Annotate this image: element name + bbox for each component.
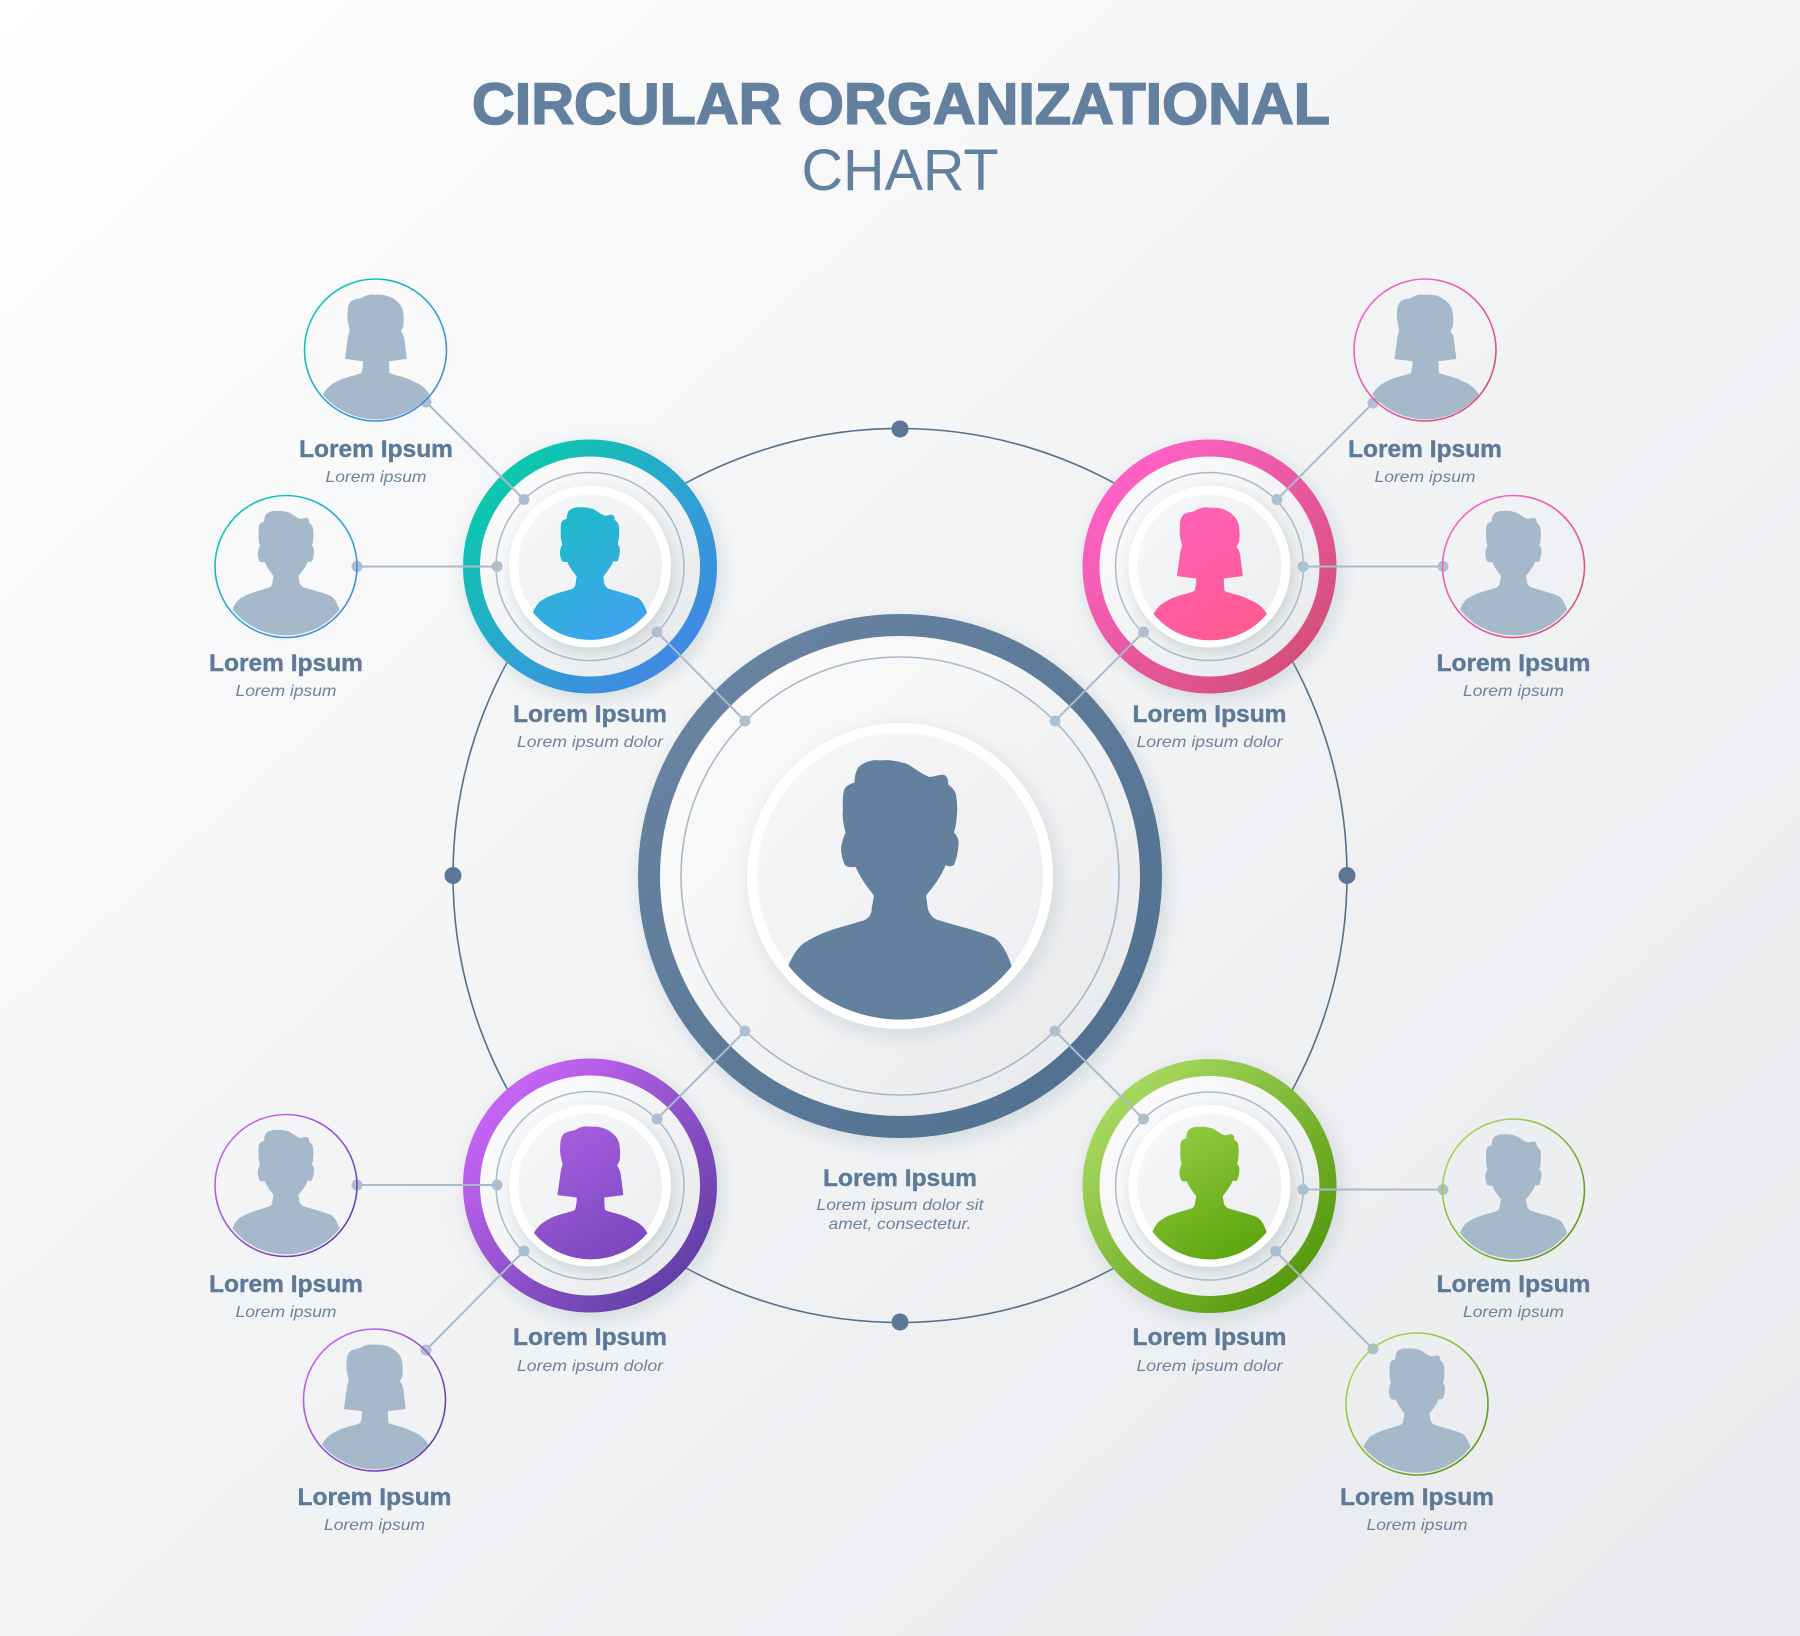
member: top-left inner <box>209 496 363 700</box>
central label: Lorem Ipsum <box>823 1165 977 1192</box>
ring <box>472 448 708 685</box>
panel: central leader <box>649 625 1151 1127</box>
outer orbit with dots <box>444 420 1356 1330</box>
title <box>472 72 1330 203</box>
panel: top-left manager <box>472 448 708 751</box>
member: bottom-right inner <box>1436 1119 1590 1321</box>
thin orbit <box>1116 1092 1304 1280</box>
member: top-left outer: Lorem Ipsum <box>299 436 453 463</box>
title: CHART <box>802 138 998 203</box>
member: bottom-right outer <box>1340 1333 1494 1534</box>
avatar <box>1153 507 1267 640</box>
label <box>513 1324 667 1375</box>
member: top-left outer <box>299 279 453 486</box>
panel: top-right manager <box>1091 448 1328 751</box>
member: top-left outer: Lorem ipsum <box>326 469 426 486</box>
member: bottom-right inner: Lorem Ipsum <box>1436 1271 1590 1298</box>
central avatar silhouette <box>788 760 1012 1020</box>
label <box>1132 701 1286 751</box>
central label: Lorem ipsum dolor sit <box>816 1197 984 1214</box>
member: bottom-left inner: Lorem Ipsum <box>209 1271 363 1298</box>
member: top-right outer <box>1348 279 1502 486</box>
label: Lorem ipsum dolor <box>517 734 664 751</box>
member: bottom-right outer: Lorem ipsum <box>1366 1517 1468 1534</box>
label: Lorem ipsum dolor <box>1136 734 1283 751</box>
avatar <box>534 1126 648 1259</box>
avatar frame <box>1133 1110 1286 1262</box>
inner orbit <box>681 657 1119 1095</box>
member: top-left inner: Lorem Ipsum <box>209 650 363 677</box>
ring <box>472 1067 708 1304</box>
member: bottom-left outer <box>298 1329 452 1534</box>
member: top-right inner: Lorem ipsum <box>1463 683 1564 700</box>
title: CIRCULAR ORGANIZATIONAL <box>472 72 1330 137</box>
member: bottom-left outer: Lorem Ipsum <box>298 1484 452 1511</box>
label: Lorem Ipsum <box>513 701 667 728</box>
label: Lorem Ipsum <box>513 1324 667 1351</box>
member: bottom-right inner: Lorem ipsum <box>1463 1304 1564 1321</box>
member: bottom-right outer: Lorem Ipsum <box>1340 1484 1494 1511</box>
avatar <box>533 507 647 640</box>
label: Lorem ipsum dolor <box>517 1358 664 1375</box>
thin orbit <box>496 472 684 660</box>
label <box>1132 1324 1286 1375</box>
central ring <box>649 625 1151 1127</box>
panel: bottom-right manager <box>1091 1068 1328 1375</box>
member: bottom-left inner <box>209 1114 363 1321</box>
thin orbit <box>496 1092 684 1280</box>
member: top-right outer: Lorem Ipsum <box>1348 436 1502 463</box>
thin orbit <box>1116 472 1304 660</box>
central avatar frame <box>752 728 1048 1024</box>
avatar frame <box>514 1109 666 1262</box>
member: top-right inner: Lorem Ipsum <box>1436 650 1590 677</box>
panel: bottom-left manager <box>472 1067 708 1375</box>
ring <box>1091 448 1328 685</box>
label: Lorem Ipsum <box>1132 701 1286 728</box>
member: top-right inner <box>1436 496 1590 700</box>
member: top-left inner: Lorem ipsum <box>236 683 336 700</box>
ring <box>1091 1068 1328 1304</box>
member: bottom-left inner: Lorem ipsum <box>236 1304 336 1321</box>
central label <box>816 1165 984 1233</box>
member: top-right outer: Lorem ipsum <box>1374 469 1476 486</box>
label: Lorem Ipsum <box>1132 1324 1286 1351</box>
label: Lorem ipsum dolor <box>1136 1358 1283 1375</box>
member: bottom-left outer: Lorem ipsum <box>324 1517 425 1534</box>
avatar frame <box>514 490 666 643</box>
label <box>513 701 667 751</box>
central label: amet, consectetur. <box>828 1216 972 1233</box>
connector lines and nodes <box>352 396 1448 1356</box>
avatar <box>1152 1127 1267 1259</box>
avatar frame <box>1133 490 1286 643</box>
